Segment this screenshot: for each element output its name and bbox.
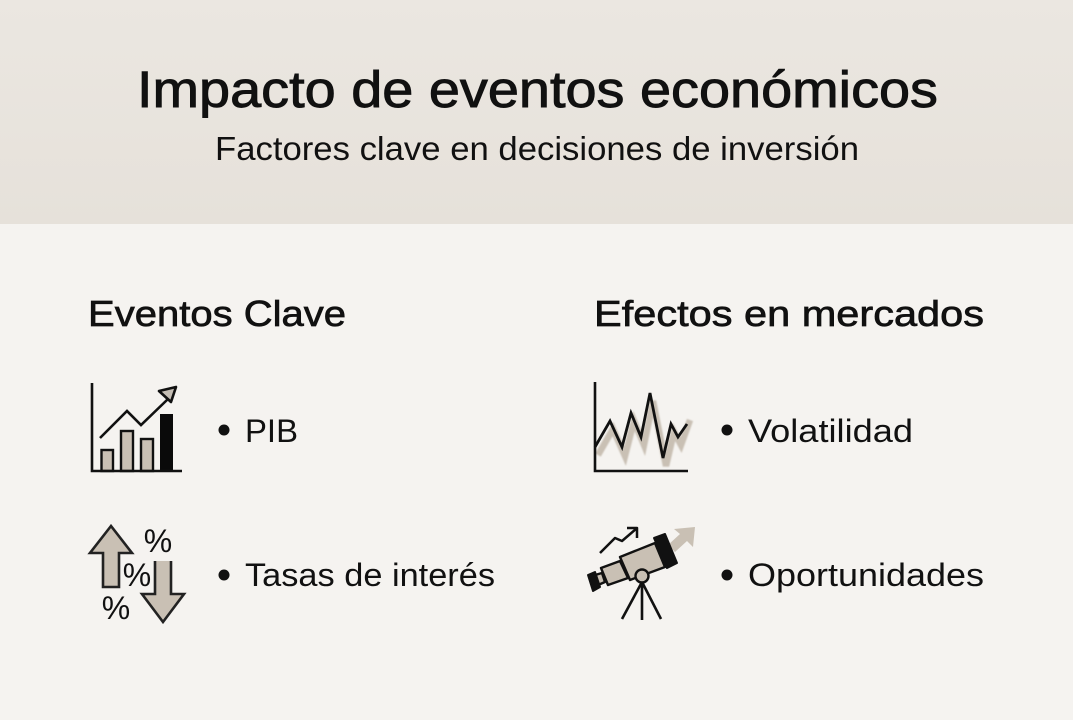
header band [0, 0, 1073, 224]
bullet: PIB: PIB [245, 413, 298, 449]
heading: eventos clave: Eventos Clave [88, 293, 346, 334]
icon: telescope [588, 527, 695, 620]
icon: interest rate arrows: % [102, 590, 130, 626]
panel: eventos clave [88, 293, 495, 626]
icon: volatility chart [595, 382, 690, 471]
icon: bar chart with rising arrow [92, 383, 182, 471]
bullet: volatilidad: Volatilidad [748, 413, 913, 449]
bullet: tasas de interés: Tasas de interés [245, 557, 495, 593]
heading: efectos en mercados: Efectos en mercados [594, 293, 984, 334]
panel: efectos en mercados [588, 293, 984, 620]
subtitle: Factores clave en decisiones de inversión [215, 130, 859, 167]
icon: interest rate arrows [90, 523, 184, 626]
bullet: oportunidades: Oportunidades [748, 557, 984, 593]
icon: interest rate arrows: % [144, 523, 172, 559]
icon: interest rate arrows: % [123, 557, 151, 593]
bullet: PIB [218, 413, 298, 449]
title: Impacto de eventos económicos [137, 61, 938, 118]
